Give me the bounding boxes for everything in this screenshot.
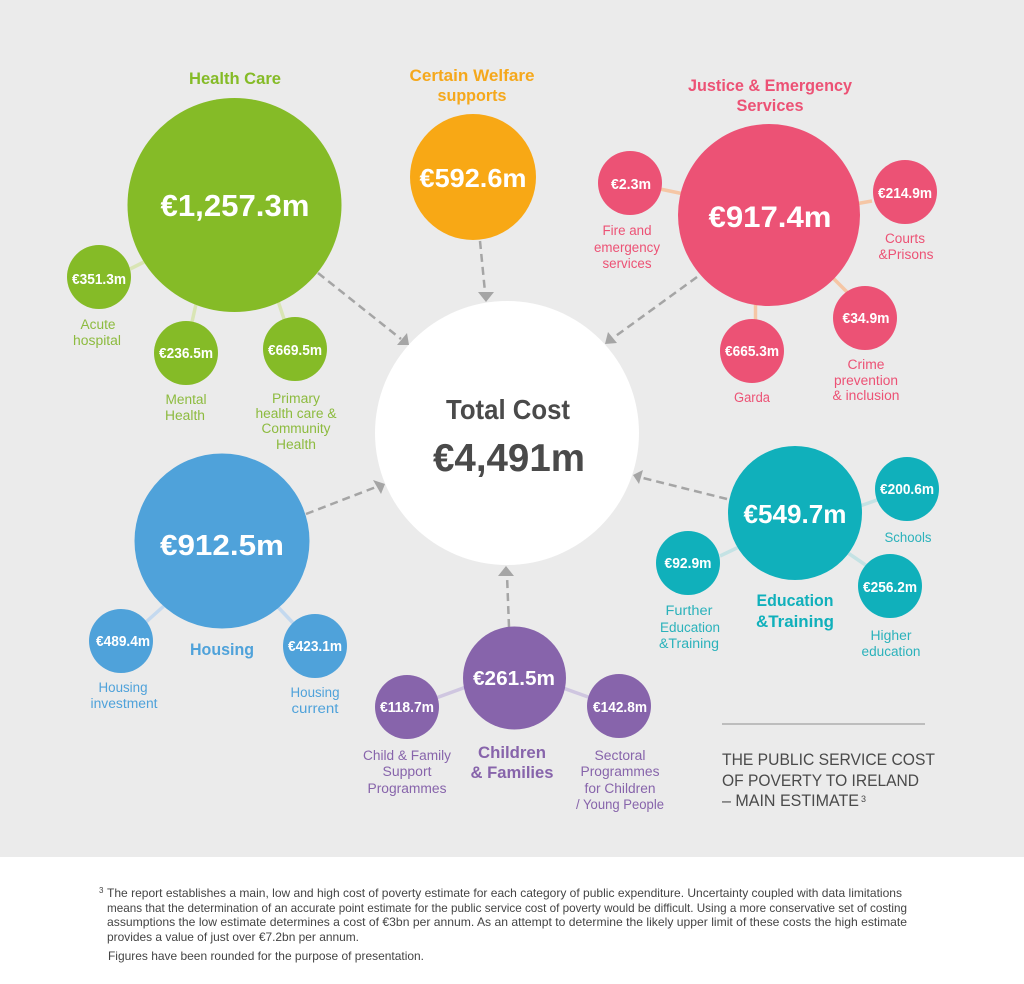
sub: crime: €34.9m <box>842 310 890 327</box>
sub: higher education: Higher <box>870 628 912 643</box>
heading: welfare: Certain Welfare <box>410 66 534 85</box>
sub: crime <box>832 286 900 403</box>
sub: housing current: €423.1m <box>288 638 342 655</box>
main circle: justice: €917.4m <box>708 201 832 234</box>
heading: welfare <box>410 66 534 105</box>
sub: sectoral programmes <box>576 674 664 812</box>
sub: child and family support <box>363 675 451 796</box>
sub: courts: €214.9m <box>878 185 932 202</box>
sub: primary health care: Community <box>262 421 331 436</box>
panel: justice and emergency services <box>594 76 937 405</box>
heading: justice: Services <box>736 96 804 115</box>
heading: children: & Families <box>470 763 554 782</box>
sub: sectoral programmes: Sectoral <box>594 748 646 763</box>
main circle: children <box>463 626 566 730</box>
arrow: housing to total <box>306 480 385 514</box>
sub: housing current <box>283 614 347 716</box>
heading: education: &Training <box>756 612 834 631</box>
main circle: housing: €912.5m <box>160 530 284 562</box>
footnote <box>99 886 907 963</box>
main circle: welfare: €592.6m <box>420 163 526 193</box>
sub: schools: €200.6m <box>880 481 934 498</box>
main circle: education <box>728 446 862 580</box>
main circle: health care: €1,257.3m <box>160 188 310 223</box>
title block: 3 <box>861 794 866 804</box>
main circle: children: €261.5m <box>473 668 555 690</box>
heading: health care: Health Care <box>189 69 281 88</box>
sub: primary health care: €669.5m <box>268 342 322 359</box>
sub: fire <box>594 151 662 271</box>
panel: housing <box>89 454 347 716</box>
sub: sectoral programmes: Programmes <box>580 764 660 779</box>
footnote: Figures have been rounded for the purpose of presentation. <box>108 949 424 963</box>
sub: schools: Schools <box>884 530 932 545</box>
panel: education and training <box>656 446 939 659</box>
arrow: children to total <box>498 566 514 627</box>
sub: mental health: Health <box>165 408 205 423</box>
panel: total cost <box>375 301 639 565</box>
main circle: housing <box>134 454 310 628</box>
sub: acute hospital: Acute <box>80 317 116 332</box>
sub: courts <box>873 160 937 262</box>
sub: garda <box>720 319 784 405</box>
main circle: health care <box>128 98 342 312</box>
sub: further education: Further <box>666 603 713 618</box>
sub: fire: Fire and <box>602 223 652 238</box>
footnote: provides a value of just over €7.2bn per annum. <box>107 930 359 944</box>
sub: sectoral programmes: / Young People <box>576 797 664 812</box>
heading: justice: Justice & Emergency <box>688 76 853 95</box>
main circle: welfare <box>410 114 536 240</box>
arrow: welfare to total <box>478 241 494 302</box>
sub: child and family support: Programmes <box>368 781 447 796</box>
sub: primary health care <box>256 317 336 452</box>
sub: primary health care: health care & <box>256 406 336 421</box>
sub: acute hospital <box>67 245 131 348</box>
sub: primary health care: Health <box>276 437 316 452</box>
heading: welfare: supports <box>438 86 506 105</box>
sub: acute hospital: €351.3m <box>72 271 126 288</box>
panel: health care <box>67 69 342 452</box>
sub: further education <box>656 531 720 651</box>
sub: mental health <box>154 321 218 423</box>
sub: higher education: education <box>862 644 920 659</box>
sub: housing investment <box>89 609 158 711</box>
sub: sectoral programmes: €142.8m <box>593 699 647 716</box>
sub: fire: emergency <box>594 240 660 255</box>
sub: higher education <box>858 554 922 659</box>
sub: crime: Crime <box>848 357 884 372</box>
sub: housing current: current <box>292 701 339 716</box>
sub: housing investment: investment <box>90 696 158 711</box>
sub: sectoral programmes: for Children <box>584 781 656 796</box>
title block: THE PUBLIC SERVICE COST <box>722 751 935 769</box>
panel: total cost: Total Cost <box>446 394 570 425</box>
sub: fire: €2.3m <box>611 176 651 193</box>
heading: children: Children <box>478 743 546 762</box>
footnote: means that the determination of an accurate point estimate for the public service cost of poverty would be difficult. Using a more conservative set of costing <box>107 901 907 915</box>
sub: housing current: Housing <box>290 685 340 700</box>
heading: justice <box>688 76 853 115</box>
sub: garda: €665.3m <box>725 343 779 360</box>
heading: children <box>470 743 554 782</box>
sub: child and family support: Child & Family <box>363 748 451 763</box>
sub: housing investment: €489.4m <box>96 633 150 650</box>
heading: education: Education <box>756 591 834 610</box>
sub: further education: &Training <box>659 636 719 651</box>
title block: – MAIN ESTIMATE <box>722 792 859 810</box>
sub: fire: services <box>602 256 652 271</box>
main circle: justice <box>678 124 860 306</box>
footnote: assumptions the low estimate determines a cost of €3bn per annum. As an attempt to determine the likely upper limit of these costs the high estimate <box>107 915 907 929</box>
sub: garda: Garda <box>734 390 770 405</box>
arrow: justice to total <box>605 277 697 344</box>
panel: certain welfare supports <box>410 66 536 240</box>
footnote: The report establishes a main, low and high cost of poverty estimate for each category of public expenditure. Uncertainty coupled with data limitations <box>107 886 902 900</box>
sub: schools <box>875 457 939 545</box>
sub: housing investment: Housing <box>98 680 148 695</box>
sub: higher education: €256.2m <box>863 579 917 596</box>
sub: mental health: Mental <box>166 392 206 407</box>
arrow: health care to total <box>318 273 409 345</box>
sub: further education: €92.9m <box>664 555 712 572</box>
sub: courts: Courts <box>885 231 925 246</box>
sub: mental health: €236.5m <box>159 345 213 362</box>
sub: further education: Education <box>660 620 720 635</box>
heading: housing: Housing <box>190 640 254 659</box>
sub: child and family support: €118.7m <box>380 699 434 716</box>
main circle: education: €549.7m <box>744 499 846 529</box>
sub: primary health care: Primary <box>272 391 320 406</box>
arrow: education to total <box>633 470 727 499</box>
panel: total cost: €4,491m <box>433 437 585 480</box>
sub: child and family support: Support <box>382 764 432 779</box>
sub: crime: prevention <box>834 373 898 388</box>
heading: education <box>756 591 834 631</box>
footnote: 3 <box>99 886 104 895</box>
sub: courts: &Prisons <box>878 247 934 262</box>
panel: children and families <box>363 626 664 812</box>
sub: acute hospital: hospital <box>73 333 121 348</box>
title block: OF POVERTY TO IRELAND <box>722 772 919 790</box>
sub: crime: & inclusion <box>832 388 900 403</box>
connectors <box>130 189 877 698</box>
title block <box>722 723 935 810</box>
